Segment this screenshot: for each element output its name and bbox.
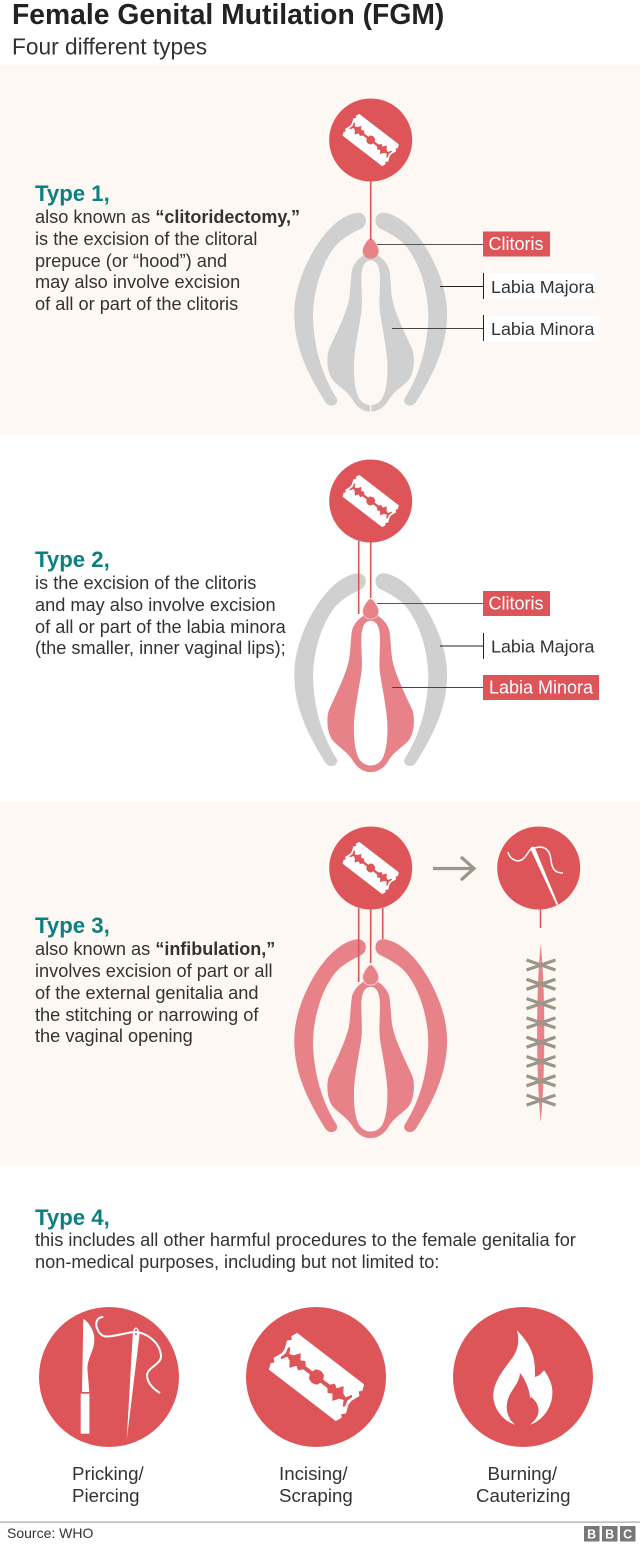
- icon: burning and cauterizing: [453, 1307, 593, 1447]
- type 1 text block: prepuce (or “hood”) and: [35, 251, 227, 271]
- label: burning: Burning/: [488, 1463, 558, 1484]
- type 1 text block: also known as “clitoridectomy,”: [35, 207, 300, 227]
- subtitle: Four different types: [12, 34, 207, 60]
- type 1 labels: Clitoris: [488, 234, 544, 254]
- panel: type 1: [0, 65, 640, 435]
- type 1 labels: Labia Minora: [491, 319, 594, 339]
- icon: pricking and piercing: [39, 1307, 179, 1447]
- type 2 text block: Type 2,: [35, 547, 110, 572]
- panel: type 4: [35, 1205, 593, 1506]
- needle icon: [497, 826, 580, 928]
- type 1 text block: is the excision of the clitoral: [35, 229, 257, 249]
- type 2 text block: [35, 547, 287, 658]
- panel: type 3: [0, 802, 640, 1165]
- label: incising: [279, 1463, 353, 1506]
- type 1 text block: [35, 181, 300, 314]
- type 2 labels: [377, 591, 599, 700]
- type 3 text block: [35, 913, 275, 1046]
- type 1 anatomy diagram: [294, 213, 447, 412]
- label: burning: [476, 1463, 571, 1506]
- type 4 text block: Type 4,: [35, 1205, 110, 1230]
- type 3 text block: also known as “infibulation,”: [35, 939, 275, 959]
- label: pricking: [72, 1463, 144, 1506]
- type 2 labels: Clitoris: [488, 594, 544, 614]
- type 1 text block: may also involve excision: [35, 272, 240, 292]
- label: pricking: Piercing: [72, 1485, 140, 1506]
- type 4 text block: [35, 1205, 576, 1272]
- source: Source: WHO: [7, 1525, 93, 1541]
- type 2 labels: Labia Majora: [491, 636, 594, 656]
- type 3 text block: involves excision of part or all: [35, 961, 273, 981]
- type 3 razor icon: [329, 826, 412, 982]
- panel: type 2: [0, 435, 640, 802]
- type 1 labels: Labia Majora: [491, 277, 594, 297]
- type 2 text block: is the excision of the clitoris: [35, 573, 256, 593]
- type 3 text block: of the external genitalia and: [35, 983, 258, 1003]
- type 3 text block: Type 3,: [35, 913, 110, 938]
- type 2 text block: of all or part of the labia minora: [35, 617, 287, 637]
- type 4 text block: non-medical purposes, including but not limited to:: [35, 1252, 439, 1272]
- arrow: [433, 857, 474, 880]
- BBC logo: B: [587, 1527, 596, 1541]
- icon: incising and scraping: [246, 1307, 386, 1447]
- BBC logo: B: [605, 1527, 614, 1541]
- type 2 razor icon: [329, 460, 412, 614]
- label: burning: Cauterizing: [476, 1485, 571, 1506]
- BBC logo: [584, 1526, 636, 1542]
- type 2 labels: Labia Minora: [489, 678, 594, 698]
- type 1 text block: of all or part of the clitoris: [35, 294, 238, 314]
- type 2 text block: (the smaller, inner vaginal lips);: [35, 638, 286, 658]
- type 1 razor icon: [329, 98, 412, 240]
- BBC logo: C: [623, 1527, 632, 1541]
- type 2 text block: and may also involve excision: [35, 595, 276, 615]
- type 4 text block: this includes all other harmful procedures to the female genitalia for: [35, 1230, 576, 1250]
- label: incising: Scraping: [279, 1485, 353, 1506]
- label: pricking: Pricking/: [72, 1463, 144, 1484]
- stitched closure: [526, 944, 556, 1122]
- type 1 text block: Type 1,: [35, 181, 110, 206]
- type 3 anatomy diagram: [294, 939, 447, 1138]
- type 3 text block: the vaginal opening: [35, 1026, 193, 1046]
- label: incising: Incising/: [279, 1463, 348, 1484]
- type 3 text block: the stitching or narrowing of: [35, 1005, 259, 1025]
- type 1 labels: [377, 232, 600, 341]
- type 2 anatomy diagram: [294, 573, 447, 772]
